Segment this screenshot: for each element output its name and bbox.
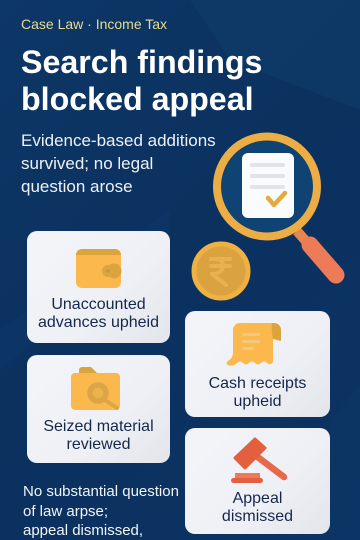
card: unaccounted advances [27,231,170,343]
icon: folder with magnifier [71,367,120,410]
subtitle: Evidence-based additions [21,131,216,150]
label: Cash receipts [209,374,306,392]
label: advances upheid [38,314,159,331]
subtitle [21,131,216,196]
card: appeal dismissed [185,428,330,534]
label: dismissed [222,508,293,525]
label: Unaccounted [51,296,146,313]
conclusion text [23,483,179,539]
title [21,44,262,117]
card: seized material [27,354,170,463]
icon: receipt scroll [226,323,281,366]
label: Appeal [233,490,282,507]
label [43,418,154,452]
subtitle: question arose [21,177,133,196]
label: Seized material [43,418,154,434]
eyebrow: Case Law · Income Tax [21,16,167,32]
conclusion text: of law arpse; [23,502,108,520]
icon: gavel [231,437,288,483]
card: cash receipts [185,310,330,417]
conclusion text: No substantial question [23,483,179,500]
title: blocked appeal [21,81,254,117]
label: reviewed [66,436,131,452]
title: Search findings [21,44,262,80]
label [222,490,293,525]
subtitle: survived; no legal [21,154,153,173]
label [209,374,306,410]
label: upheid [233,392,282,410]
conclusion text: appeal dismissed, [23,522,143,539]
icon: wallet [76,249,122,288]
label [38,296,159,331]
